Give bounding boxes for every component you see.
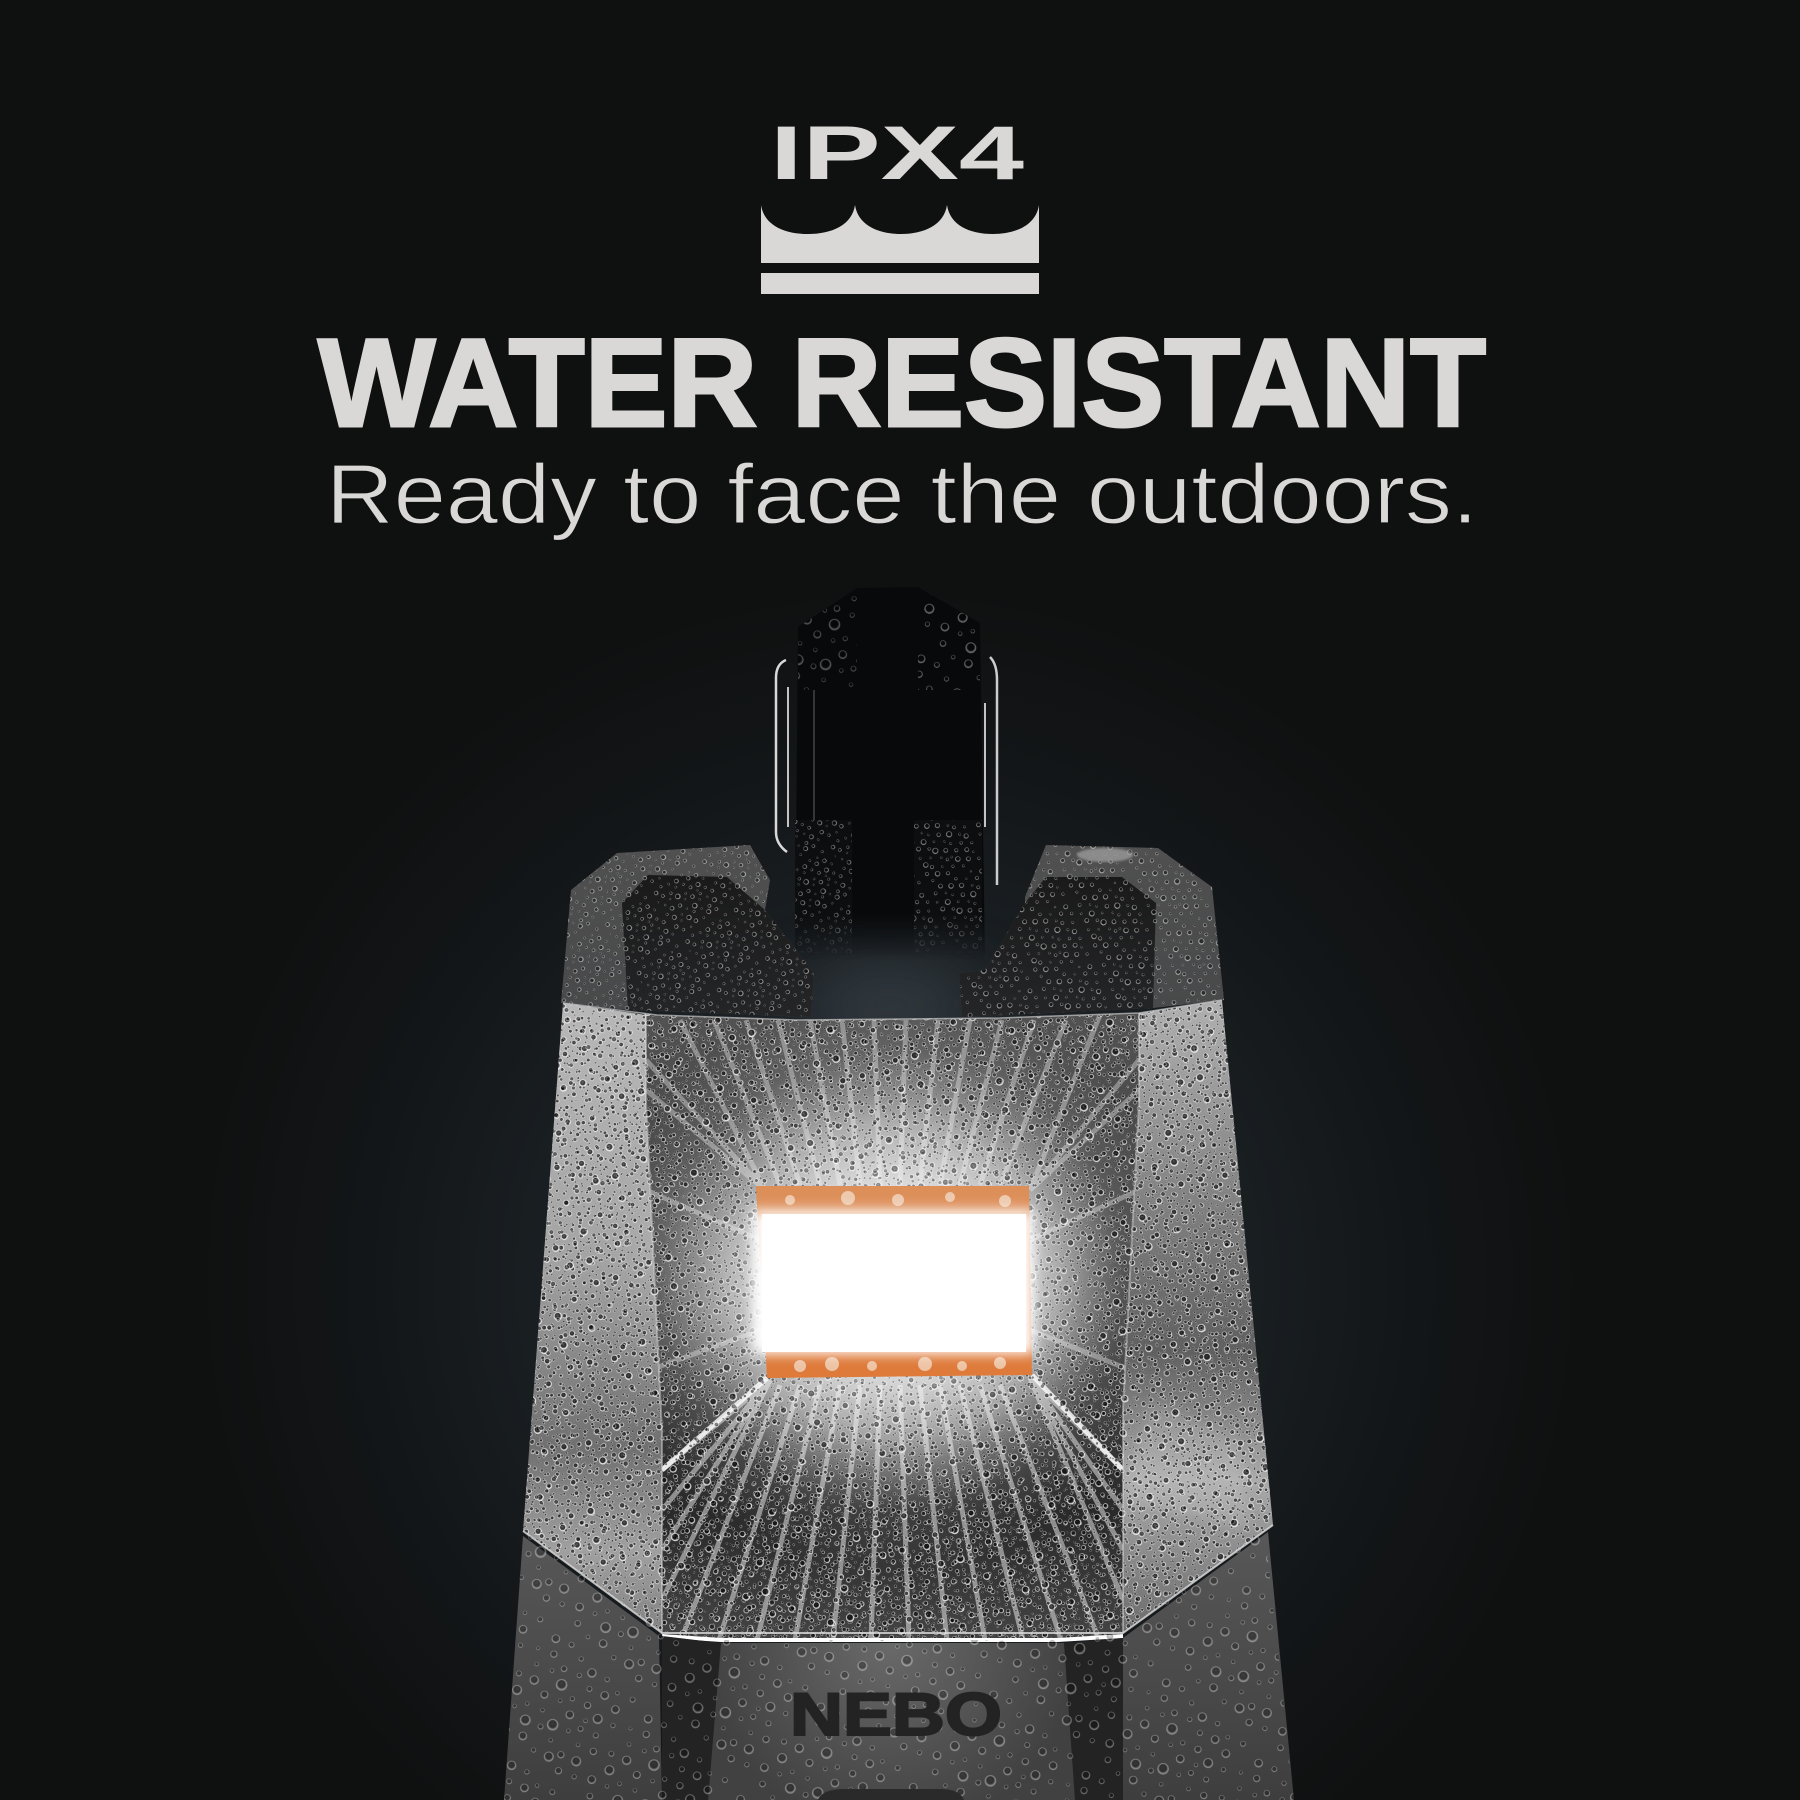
centre lens panel	[646, 1013, 1139, 1640]
right lens panel	[1123, 1000, 1273, 1633]
IPX4 label: IPX4	[770, 111, 1024, 196]
infographic canvas	[316, 126, 1486, 1800]
water droplets on lens	[520, 1000, 1280, 1645]
centre plate	[708, 1643, 1075, 1800]
bottom button	[818, 1789, 964, 1800]
heading block	[318, 111, 1486, 541]
right body section	[1123, 1532, 1294, 1800]
clear lens housing	[520, 940, 1280, 1645]
icon: water crown	[761, 205, 1039, 294]
subtitle: Ready to face the outdoors.	[326, 447, 1478, 541]
lower body	[500, 1530, 1300, 1800]
droplets on body	[500, 1530, 1300, 1800]
side panel glow	[640, 1170, 1250, 1530]
lens edges	[523, 1000, 1273, 1640]
lantern product	[500, 587, 1300, 1800]
upper body shoulders	[561, 845, 1224, 1017]
light rays	[646, 1014, 1139, 1638]
board droplets	[785, 1191, 1011, 1372]
left body section	[504, 1536, 662, 1800]
glow behind lantern neck	[800, 960, 980, 1050]
LED light source	[722, 1147, 1062, 1417]
title: water resistant: WATER RESISTANT	[318, 314, 1486, 453]
lantern handle	[776, 587, 997, 960]
NEBO logo: NEBO	[790, 1681, 1002, 1748]
white LED emitter	[752, 1210, 1034, 1354]
dark body recesses	[662, 1636, 721, 1800]
left lens panel	[523, 1003, 662, 1633]
orange LED board	[756, 1186, 1032, 1378]
